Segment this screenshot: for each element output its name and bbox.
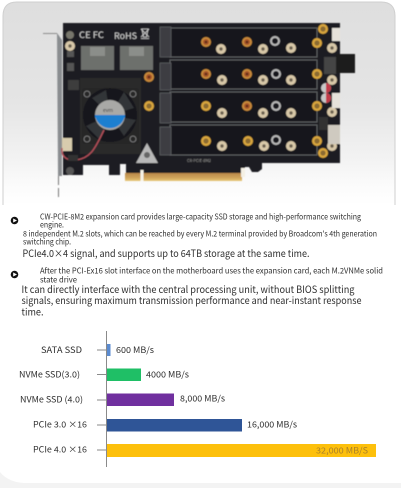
bullet icon	[11, 271, 18, 278]
bar chart: transfer speeds	[19, 331, 376, 467]
certification marks: RoHS	[114, 30, 137, 42]
feature description two: After the PCI-Ex16 slot interface on the motherboard uses the expansion card, each M.2VNMe solid	[40, 266, 383, 276]
feature description two: signals, ensuring maximum transmission performance and near-instant response	[22, 293, 362, 307]
bar: NVMe SSD 4.0	[20, 392, 225, 406]
M.2 slots	[170, 28, 317, 155]
bar: PCIe 3.0 x16: PCIe 3.0 ×16	[33, 418, 87, 430]
product photo: PCIe expansion card	[43, 23, 355, 200]
certification marks	[79, 29, 149, 42]
bar: NVMe SSD 4.0: NVMe SSD (4.0)	[20, 394, 83, 406]
bar: NVMe SSD 3.0: 4000 MB/s	[146, 368, 189, 380]
feature description one: engine.	[40, 220, 64, 230]
fan cable and connector	[62, 130, 104, 161]
gold edge connector	[125, 168, 245, 181]
bullet icon	[11, 217, 18, 224]
SFF connectors	[81, 46, 153, 70]
feature description one	[11, 212, 377, 260]
M.2 connectors	[160, 27, 171, 155]
axis	[106, 331, 108, 467]
cooling fan	[80, 78, 141, 154]
bar: NVMe SSD 3.0: NVMe SSD(3.0)	[19, 368, 80, 380]
brass standoffs	[144, 24, 337, 158]
bar: PCIe 4.0 x16: 32,000 MB/S	[316, 444, 368, 456]
background panel behind product photo	[3, 2, 395, 205]
triangle logo	[136, 143, 158, 163]
circuit board	[63, 23, 340, 175]
bar: SATA SSD	[41, 344, 154, 356]
metal bracket	[43, 33, 62, 200]
bar: NVMe SSD 4.0: 8,000 MB/s	[180, 392, 225, 404]
bar: SATA SSD: SATA SSD	[41, 344, 82, 356]
bottom panel edge	[0, 472, 401, 488]
feature description one: switching chip.	[23, 236, 71, 248]
cooling fan: evm	[103, 107, 113, 114]
board model mark: CR-PCIE-8M2	[187, 158, 212, 164]
bar: PCIe 4.0 x16	[33, 444, 376, 457]
certification marks: CE FC	[79, 29, 105, 41]
feature description one: PCIe4.0×4 signal, and supports up to 64TB storage at the same time.	[22, 246, 310, 260]
bar: PCIe 3.0 x16	[33, 418, 297, 432]
bar: PCIe 3.0 x16: 16,000 MB/s	[247, 418, 297, 430]
feature description one: CW-PCIE-8M2 expansion card provides large-capacity SSD storage and high-performance switching	[40, 212, 362, 222]
feature description two	[11, 266, 383, 318]
feature description two: state drive	[40, 274, 77, 286]
bar: NVMe SSD 3.0	[19, 368, 189, 381]
feature description two: time.	[22, 304, 44, 318]
right side connectors and capacitors	[319, 28, 340, 144]
feature description two: It can directly interface with the central processing unit, without BIOS splitting	[22, 282, 355, 296]
rear connector tab	[336, 54, 355, 73]
bar: SATA SSD: 600 MB/s	[116, 344, 154, 356]
bar: PCIe 4.0 x16: PCIe 4.0 ×16	[33, 444, 87, 456]
left side mounts and components	[65, 31, 79, 175]
